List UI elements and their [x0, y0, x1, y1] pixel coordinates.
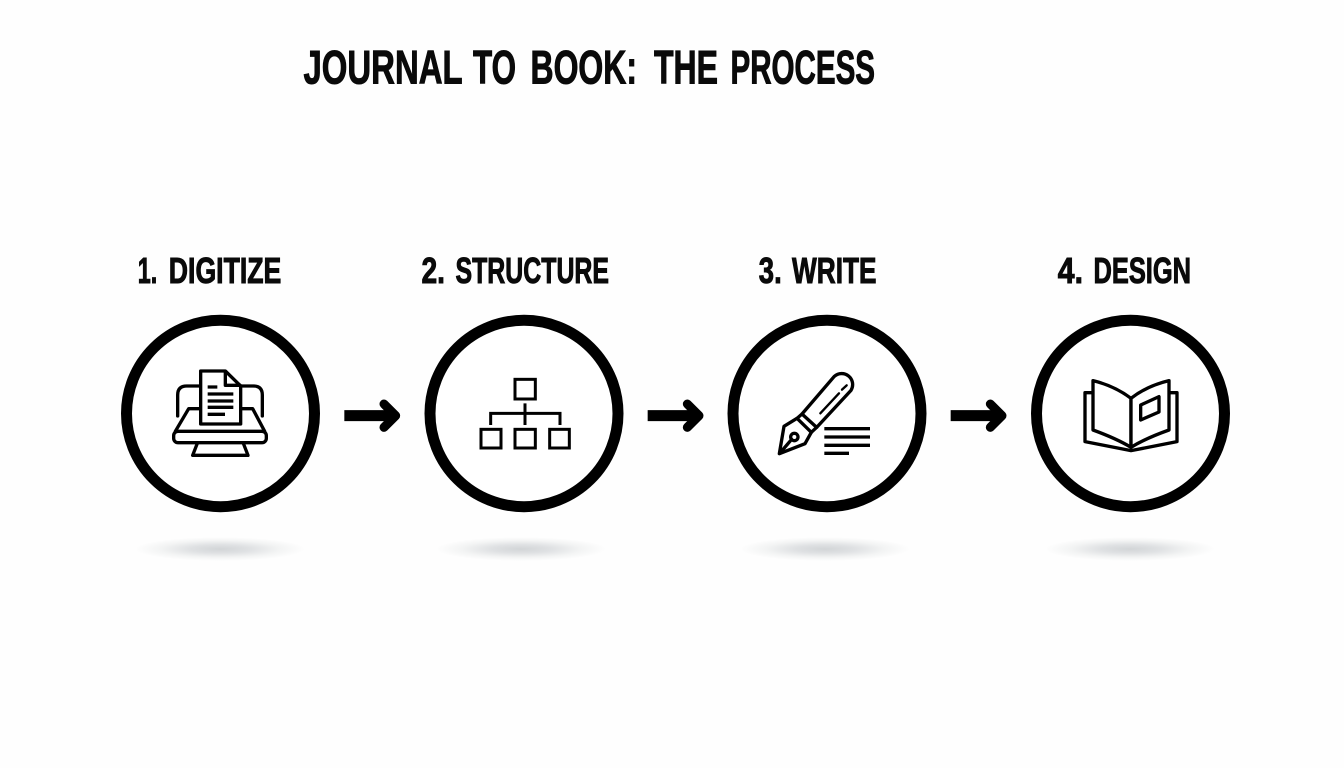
step 3 circle: [733, 320, 921, 507]
arrow 3 to 4: [951, 404, 1002, 427]
icon: open book: [1085, 381, 1177, 451]
step 3 shadow: [740, 537, 910, 561]
title: BOOK:: [530, 40, 637, 94]
step 2 label: 2.: [422, 250, 445, 291]
step 4 label: 4.: [1058, 250, 1083, 291]
step 4: design: [1036, 250, 1224, 561]
step 3 label: WRITE: [792, 250, 876, 291]
arrow 2 to 3: [648, 404, 699, 427]
step 4 label: DESIGN: [1094, 250, 1191, 291]
step 1 label: DIGITIZE: [169, 250, 281, 291]
step 4 shadow: [1045, 537, 1215, 561]
icon: hierarchy chart: [481, 379, 569, 448]
title: THE: [654, 40, 718, 94]
step 1 circle: [126, 320, 314, 507]
step 1 label: 1.: [138, 250, 157, 291]
step 2 shadow: [436, 537, 606, 561]
step 1 shadow: [135, 537, 305, 561]
step 1: digitize: [126, 250, 314, 561]
step 3 label: 3.: [759, 250, 782, 291]
icon: scanner with document: [174, 371, 266, 455]
title: JOURNAL: [304, 40, 462, 94]
step 2: structure: [422, 250, 618, 561]
step 4 circle: [1036, 320, 1224, 507]
step 2 circle: [430, 320, 618, 507]
step 2 label: STRUCTURE: [456, 250, 609, 291]
icon: fountain pen with text lines: [779, 374, 870, 454]
step 3: write: [733, 250, 921, 561]
title: PROCESS: [730, 40, 875, 94]
arrow 1 to 2: [344, 404, 396, 427]
title: TO: [473, 40, 516, 94]
